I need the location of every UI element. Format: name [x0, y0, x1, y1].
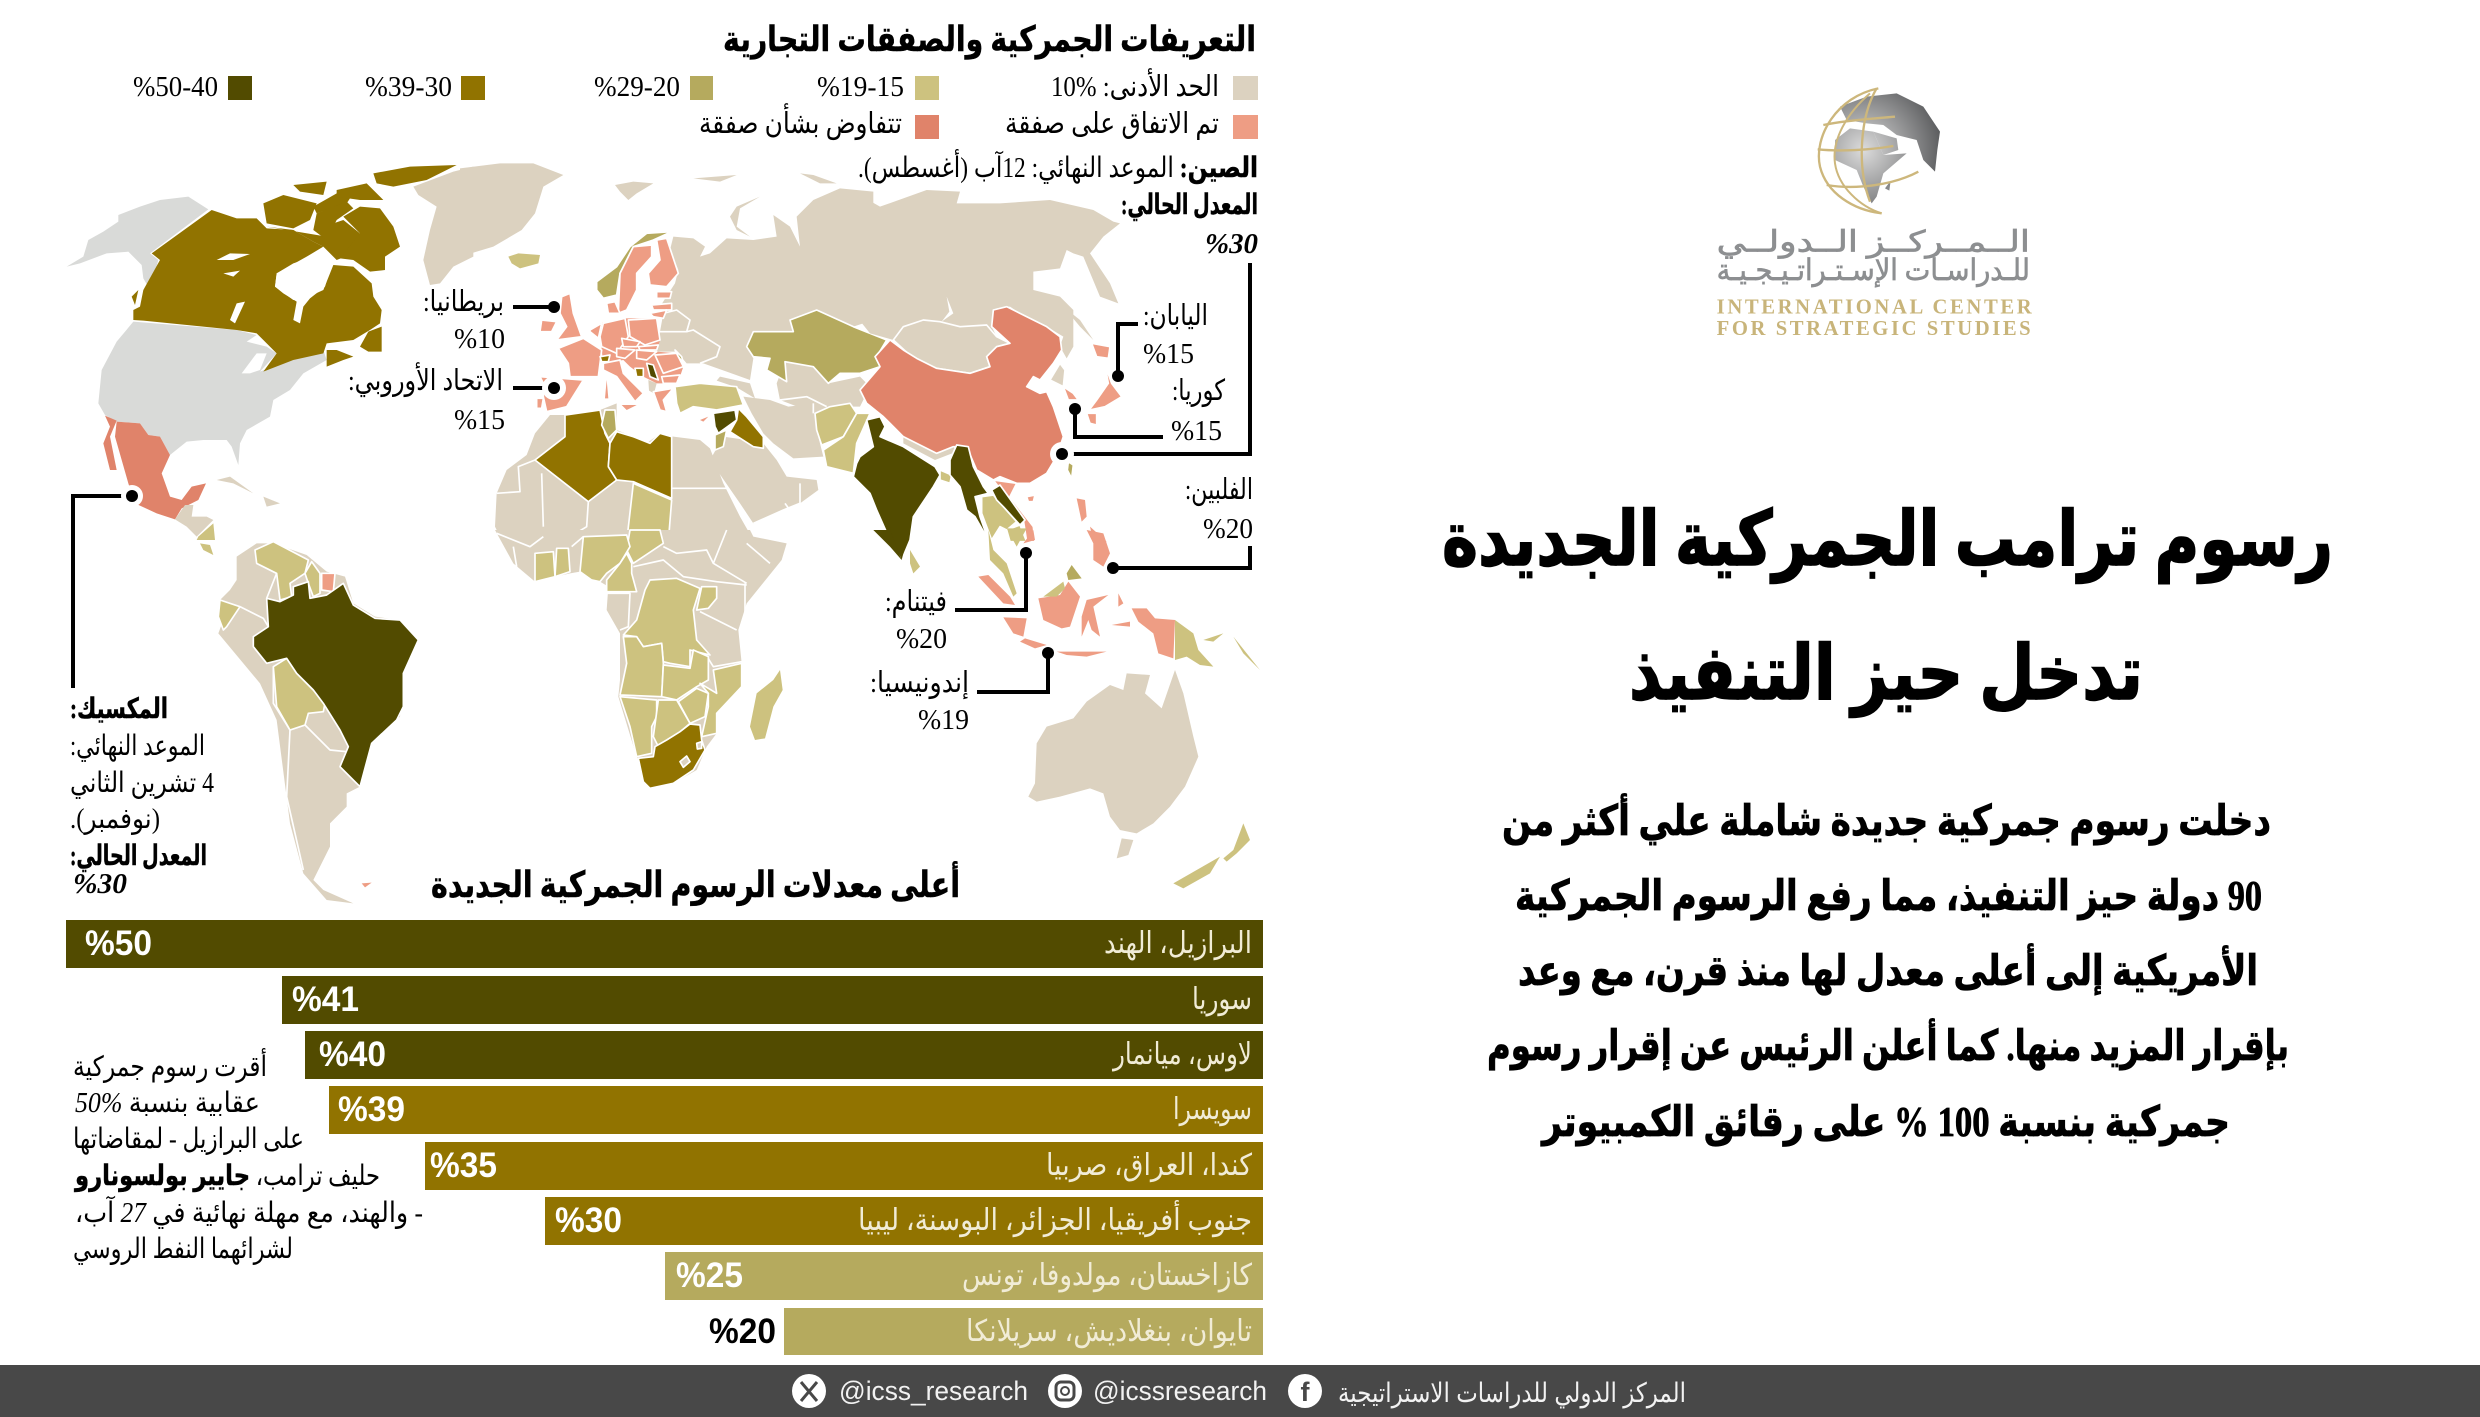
text block: Brazil and India note	[73, 1047, 423, 1265]
callout: Britain: بريطانيا:	[423, 286, 504, 318]
bar chart: البرازيل، الهند	[1104, 927, 1252, 961]
callout: Japan: اليابان:	[1143, 300, 1208, 332]
callout: Indonesia: إندونيسيا:	[870, 667, 969, 700]
text block: Brazil and India note: عقابية بنسبة %50	[75, 1088, 260, 1119]
icon: globe	[1818, 88, 1940, 213]
icon: Instagram	[1048, 1374, 1082, 1408]
bar chart: لاوس، ميانمار	[1111, 1038, 1252, 1072]
footer bar: @icss_research	[839, 1376, 1028, 1406]
callout: European Union: الاتحاد الأوروبي:	[348, 361, 503, 398]
icon: X	[792, 1374, 826, 1408]
bar chart: سوريا	[1192, 983, 1252, 1016]
text block: Brazil and India note: أقرت رسوم جمركية	[73, 1047, 267, 1083]
footer bar: @icssresearch	[1093, 1376, 1267, 1406]
text block: summary paragraph: الأمريكية إلى أعلى معدل لها منذ قرن، مع وعد	[1518, 943, 2258, 996]
callout: Philippines	[1107, 474, 1253, 574]
legend: %50-40	[133, 71, 218, 103]
legend: الحد الأدنى: %10	[1051, 67, 1219, 103]
logo: International Center for Strategic Studies: الــمــركــز الــدولــي	[1717, 227, 2030, 260]
text block: Brazil and India note: على البرازيل - لمقاضاتها	[73, 1124, 304, 1155]
callout: China: %30	[1205, 229, 1258, 260]
region: Europe, Middle East, North Africa	[460, 163, 887, 542]
logo: International Center for Strategic Studies	[1717, 88, 2033, 340]
bar chart	[66, 920, 1263, 1355]
bar chart: سويسرا	[1173, 1093, 1252, 1126]
region: North America	[67, 165, 473, 540]
legend: %19-15	[817, 71, 904, 103]
callout: Mexico: (نوفمبر).	[70, 804, 160, 835]
legend: %39-30	[365, 71, 452, 103]
callout: Philippines: %20	[1203, 513, 1253, 545]
main title	[1442, 498, 2333, 718]
callout: Japan: %15	[1143, 338, 1194, 370]
callout: Indonesia: %19	[918, 704, 969, 736]
callout: Britain	[423, 286, 560, 355]
text block: summary paragraph: دخلت رسوم جمركية جديدة شاملة علي أكثر من	[1502, 793, 2271, 846]
callout: European Union: %15	[454, 404, 505, 436]
callout: European Union	[348, 361, 566, 436]
legend	[133, 67, 1258, 141]
bar chart: %35	[430, 1146, 497, 1185]
legend: %29-20	[594, 71, 680, 103]
callout: Britain: %10	[454, 323, 505, 355]
heading: highest new tariff rates: أعلى معدلات الرسوم الجمركية الجديدة	[431, 861, 960, 906]
bar chart: كازاخستان، مولدوفا، تونس	[962, 1259, 1253, 1293]
bar chart: تايوان، بنغلاديش، سريلانكا	[966, 1315, 1252, 1348]
callout: Vietnam	[885, 547, 1032, 655]
icon: Facebook	[1288, 1374, 1322, 1408]
world map	[67, 163, 1260, 903]
callout: Korea	[1069, 375, 1225, 447]
callout: Mexico: 4 تشرين الثاني	[70, 768, 214, 799]
bar chart: %20	[709, 1312, 776, 1351]
text block: summary paragraph: 90 دولة حيز التنفيذ، مما رفع الرسوم الجمركية	[1515, 874, 2262, 921]
callout: Korea: %15	[1171, 415, 1222, 447]
bar chart: %41	[292, 980, 359, 1019]
bar chart: %39	[338, 1090, 405, 1129]
callout: Mexico: المكسيك:	[70, 694, 168, 725]
callout: Japan	[1112, 300, 1208, 382]
text block: Brazil and India note: حليف ترامب، جايير بولسونارو	[73, 1161, 380, 1192]
text block: Brazil and India note: - والهند، مع مهلة نهائية في 27 آب،	[75, 1196, 423, 1229]
legend: تتفاوض بشأن صفقة	[699, 102, 902, 140]
text block: Brazil and India note: لشرائهما النفط الروسي	[73, 1234, 293, 1265]
callout: China: المعدل الحالي:	[1121, 190, 1258, 221]
callout: Philippines: الفلبين:	[1185, 474, 1253, 506]
footer bar	[0, 1365, 2480, 1417]
region: salmon base of central Europe	[600, 318, 683, 383]
callout: Mexico: المعدل الحالي:	[70, 841, 207, 872]
bar chart: كندا، العراق، صربيا	[1046, 1149, 1253, 1182]
icon: Facebook: f	[1300, 1377, 1310, 1407]
bar chart: %40	[319, 1035, 386, 1074]
footer bar: المركز الدولي للدراسات الاستراتيجية	[1338, 1378, 1686, 1409]
callout: Indonesia	[870, 647, 1054, 736]
region: South America	[200, 542, 418, 903]
callout: Mexico	[70, 485, 214, 900]
callout: China	[858, 148, 1258, 466]
logo: International Center for Strategic Studies: للـدراسـات الإسـتـراتـيـجـيـة	[1717, 255, 2030, 288]
bar chart: %30	[555, 1201, 622, 1240]
callout: Korea: كوريا:	[1172, 375, 1225, 407]
callout: China: الصين: الموعد النهائي: 12آب (أغسطس).	[858, 148, 1258, 184]
callout: Mexico: %30	[73, 869, 127, 900]
callout: Vietnam: %20	[896, 623, 947, 655]
logo: International Center for Strategic Studies: INTERNATIONAL CENTER	[1717, 296, 2033, 318]
bar chart: جنوب أفريقيا، الجزائر، البوسنة، ليبيا	[858, 1199, 1252, 1237]
text block: summary paragraph	[1487, 793, 2289, 1147]
callout: Vietnam: فيتنام:	[885, 586, 947, 618]
callout: Mexico: الموعد النهائي:	[70, 731, 205, 762]
legend: تم الاتفاق على صفقة	[1005, 108, 1219, 141]
heading: tariffs and deals: التعريفات الجمركية والصفقات التجارية	[723, 20, 1256, 60]
logo: International Center for Strategic Studies: FOR STRATEGIC STUDIES	[1717, 318, 2031, 340]
main title: تدخل حيز التنفيذ	[1629, 632, 2143, 718]
region: Southeast Asia and Oceania	[860, 527, 1260, 888]
region: Asia	[853, 190, 1122, 560]
bar chart: %50	[85, 924, 152, 963]
region: Southern Africa	[495, 530, 787, 788]
text block: summary paragraph: جمركية بنسبة 100 % على رقائق الكمبيوتر	[1540, 1100, 2230, 1147]
bar chart: %25	[676, 1256, 743, 1295]
